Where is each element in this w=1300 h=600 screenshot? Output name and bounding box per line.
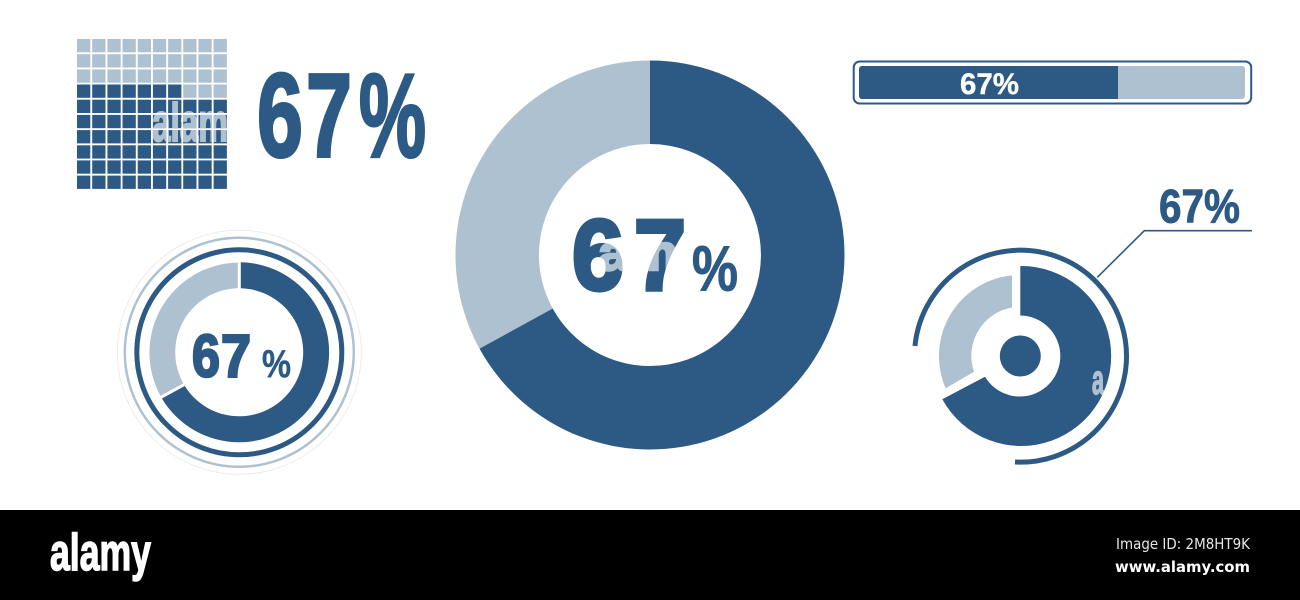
outer arc (915, 250, 1127, 462)
centre dot (1000, 336, 1041, 376)
watermark fragments: alam (152, 93, 228, 153)
bar filled 67% (859, 66, 1118, 99)
segment: filled 67% (942, 266, 1111, 446)
segment: remaining 33% (939, 275, 1012, 388)
bar remaining track (1117, 66, 1245, 99)
watermark fragments: am (598, 225, 678, 281)
donut value: 67% (572, 200, 738, 312)
panel: ringed donut chart (117, 230, 361, 474)
outer rings (117, 230, 361, 474)
donut segment: filled 67% (480, 60, 844, 450)
watermark fragments: a (1092, 356, 1104, 403)
waffle chart: 100 squares (77, 39, 227, 189)
panel: waffle grid with 67% (77, 39, 426, 189)
footer logo: alamy: alamy (50, 524, 151, 582)
donut segment: remaining 33% (455, 60, 650, 349)
watermark fragments (152, 93, 1104, 403)
ring value: 67%: 6 (192, 322, 220, 390)
footer image id: Image ID: 2M8HT9K (1116, 535, 1251, 553)
panel: progress bar (854, 62, 1251, 104)
donut value: 67%: 7 (634, 200, 686, 312)
bar frame (854, 62, 1251, 104)
donut value: 67%: 6 (572, 200, 624, 312)
waffle value: 67% (257, 50, 426, 182)
waffle value: 67%: 7 (306, 50, 352, 182)
ring value: 67%: 7 (221, 322, 251, 390)
callout value: 67%: 67% (1159, 180, 1240, 232)
ring value: 67% (192, 322, 291, 390)
leader line (1097, 231, 1252, 277)
ring segment: filled 67% (162, 262, 329, 442)
footer url: www.alamy.com (1115, 558, 1250, 576)
ring segment: remaining 33% (149, 263, 238, 396)
donut value: 67%: % (692, 232, 738, 304)
waffle value: 67%: 6 (257, 50, 303, 182)
panel: callout donut chart (915, 180, 1252, 462)
waffle value: 67%: % (359, 50, 426, 182)
footer band (0, 510, 1300, 600)
bar value: 67%: 67% (960, 68, 1019, 101)
panel: large donut chart (455, 60, 844, 450)
ring value: 67%: % (262, 343, 291, 386)
